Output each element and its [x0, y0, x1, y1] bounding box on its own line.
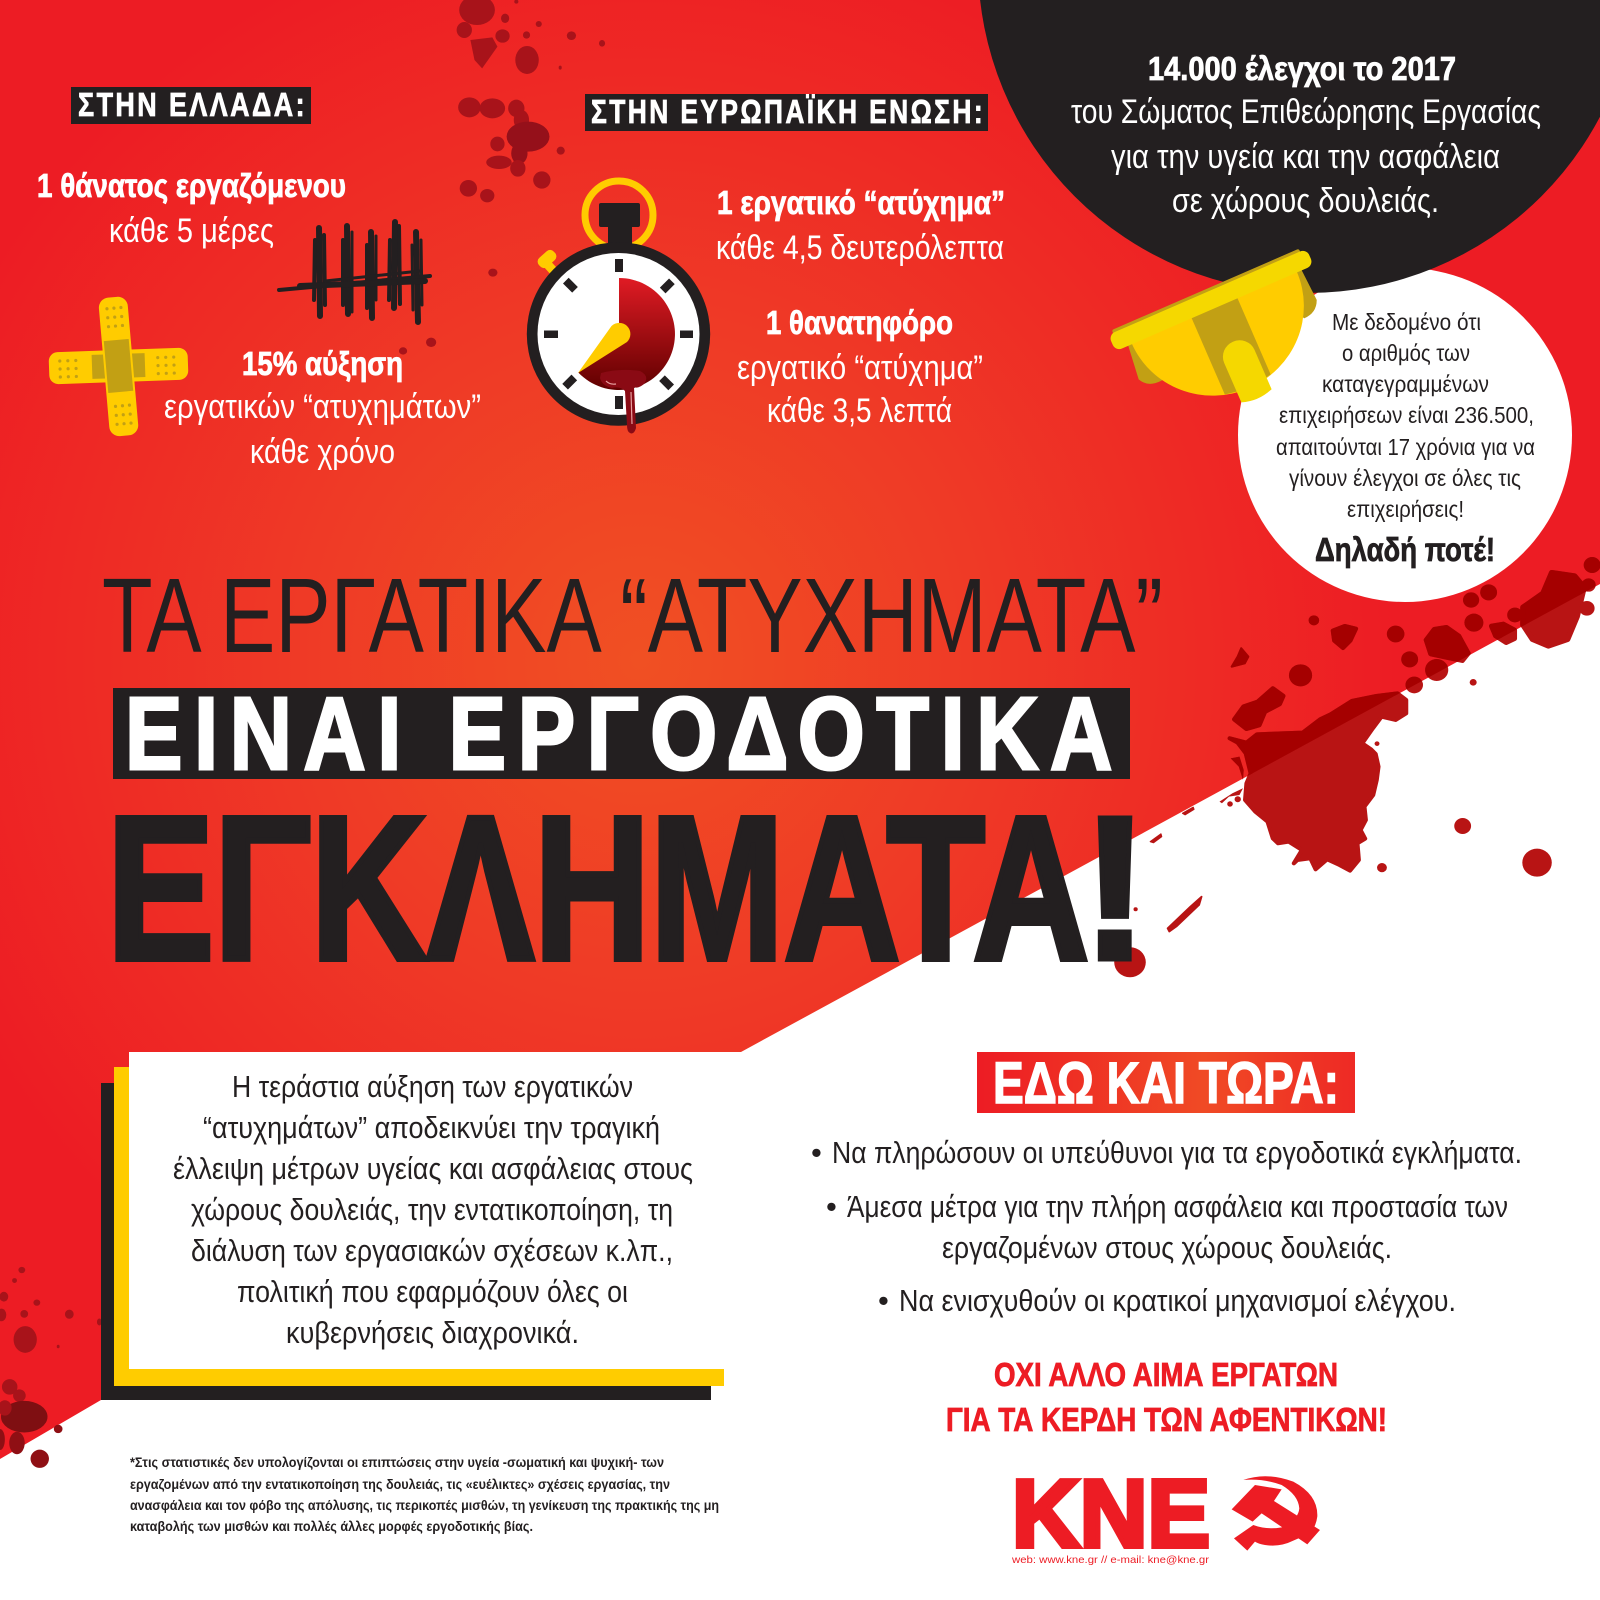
icon: bleeding stopwatch	[527, 181, 710, 433]
heading: here and now: ΕΔΩ ΚΑΙ ΤΩΡΑ:	[993, 1051, 1339, 1116]
heading: in the European Union: ΣΤΗΝ ΕΥΡΩΠΑΪΚΗ ΕΝΩΣΗ:	[591, 93, 985, 130]
panel: explanatory text box	[101, 1052, 741, 1400]
black circle: inspections statistic: 14.000 έλεγχοι το 2017	[1148, 50, 1456, 87]
blood splatter: main stain on the diagonal edge	[1114, 557, 1600, 977]
panel: explanatory text box: διάλυση των εργασιακών σχέσεων κ.λπ.,	[191, 1233, 673, 1268]
demands list: •	[811, 1135, 822, 1170]
demands list: Να ενισχυθούν οι κρατικοί μηχανισμοί ελέγχου.	[899, 1283, 1456, 1318]
demands list: •	[878, 1283, 889, 1318]
text block: 15% increase: 15% αύξηση	[242, 345, 403, 382]
panel: explanatory text box: Η τεράστια αύξηση των εργατικών	[232, 1069, 633, 1104]
demands list: εργαζομένων στους χώρους δουλειάς.	[942, 1230, 1392, 1265]
demands list: •	[826, 1189, 837, 1224]
text block: 15% increase: κάθε χρόνο	[250, 433, 395, 471]
icon: tally marks	[279, 222, 430, 322]
white circle: inspection callout: επιχειρήσεις!	[1347, 496, 1464, 522]
text block: fatal accident every 3.5 minutes: εργατικό “ατύχημα”	[737, 349, 983, 387]
white circle: inspection callout: επιχειρήσεων είναι 236.500,	[1279, 402, 1534, 428]
text block: accident every 4.5 seconds	[716, 184, 1005, 267]
icon: crossed bandage	[48, 296, 189, 437]
text block: fatal accident every 3.5 minutes: κάθε 3,5 λεπτά	[767, 392, 952, 430]
icon: yellow hard hat	[1107, 246, 1354, 443]
logo: hammer and sickle	[1232, 1476, 1320, 1551]
white circle: inspection callout: καταγεγραμμένων	[1322, 371, 1489, 397]
footnote: εργαζομένων από την εντατικοποίηση της δουλειάς, τις «ευέλικτες» σχέσεις εργασίας, την	[130, 1476, 670, 1492]
heading: in Greece: ΣΤΗΝ ΕΛΛΑΔΑ:	[78, 86, 307, 123]
panel: explanatory text box: κυβερνήσεις διαχρονικά.	[286, 1315, 579, 1350]
text block: fatal accident every 3.5 minutes	[737, 304, 983, 430]
text block: 15% increase	[164, 345, 481, 471]
text block: one death every 5 days: 1 θάνατος εργαζόμενου	[37, 167, 346, 204]
footnote: ανασφάλεια και τον φόβο της απόλυσης, τις περικοπές μισθών, τη γενίκευση της πρακτικής της μη	[130, 1497, 719, 1513]
white circle: inspection callout: γίνουν έλεγχοι σε όλες τις	[1289, 465, 1521, 491]
white circle: inspection callout: Δηλαδή ποτέ!	[1315, 531, 1495, 568]
blood splatter: bottom left	[0, 1267, 102, 1468]
title: line one: ΤΑ ΕΡΓΑΤΙΚΑ “ΑΤΥΧΗΜΑΤΑ”	[102, 557, 1163, 675]
panel: explanatory text box: πολιτική που εφαρμόζουν όλες οι	[237, 1274, 628, 1309]
white circle: inspection callout: ο αριθμός των	[1342, 340, 1470, 366]
title: line two on black band: ΕΙΝΑΙ ΕΡΓΟΔΟΤΙΚΑ	[125, 676, 1124, 791]
footnote: καταβολής των μισθών και πολλές άλλες μορφές εργοδοτικής βίας.	[130, 1518, 533, 1534]
title: line three: ΕΓΚΛΗΜΑΤΑ	[107, 774, 1089, 1003]
title: line three: !	[1081, 774, 1149, 1003]
panel: explanatory text box: έλλειψη μέτρων υγείας και ασφάλειας στους	[173, 1151, 693, 1186]
black circle: inspections statistic: σε χώρους δουλειάς.	[1172, 182, 1439, 220]
black circle: inspections statistic	[978, 0, 1600, 293]
text block: one death every 5 days: κάθε 5 μέρες	[109, 212, 274, 250]
slogan: ΟΧΙ ΑΛΛΟ ΑΙΜΑ ΕΡΓΑΤΩΝ	[994, 1356, 1338, 1393]
white circle: inspection callout: απαιτούνται 17 χρόνια για να	[1276, 434, 1535, 460]
white circle: inspection callout: Με δεδομένο ότι	[1332, 309, 1481, 335]
text block: accident every 4.5 seconds: κάθε 4,5 δευτερόλεπτα	[716, 229, 1004, 267]
panel: explanatory text box: χώρους δουλειάς, την εντατικοποίηση, τη	[191, 1192, 673, 1227]
panel: explanatory text box: “ατυχημάτων” αποδεικνύει την τραγική	[203, 1110, 660, 1145]
logo: KNE wordmark: web: www.kne.gr // e-mail: kne@kne.gr	[1011, 1554, 1210, 1566]
text block: one death every 5 days	[37, 167, 346, 250]
blood splatter: top centre	[399, 0, 605, 355]
footnote: *Στις στατιστικές δεν υπολογίζονται οι επιπτώσεις στην υγεία -σωματική και ψυχική- των	[130, 1454, 664, 1470]
slogan: ΓΙΑ ΤΑ ΚΕΡΔΗ ΤΩΝ ΑΦΕΝΤΙΚΩΝ!	[946, 1401, 1387, 1438]
black circle: inspections statistic: για την υγεία και την ασφάλεια	[1111, 138, 1500, 176]
text block: fatal accident every 3.5 minutes: 1 θανατηφόρο	[766, 304, 953, 341]
demands list	[811, 1135, 1522, 1318]
logo: KNE wordmark: ΚΝΕ	[1012, 1460, 1210, 1568]
slogan	[946, 1356, 1387, 1438]
white circle: inspection callout	[1238, 268, 1572, 602]
text block: accident every 4.5 seconds: 1 εργατικό “ατύχημα”	[717, 184, 1005, 221]
text block: 15% increase: εργατικών “ατυχημάτων”	[164, 388, 481, 426]
footnote	[130, 1454, 719, 1534]
